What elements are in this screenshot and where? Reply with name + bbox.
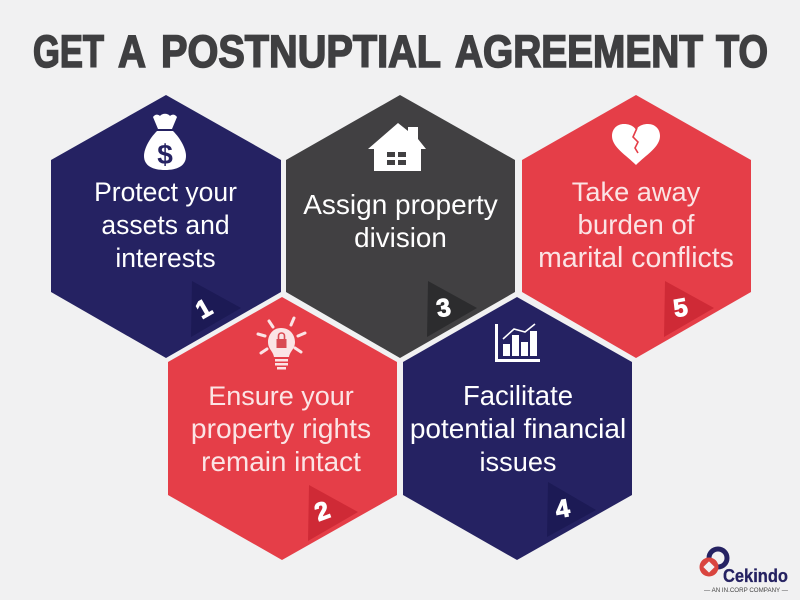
text: facilitate potential financial issues: potential financial — [410, 413, 626, 444]
badge: number 5: 5 — [671, 293, 690, 323]
logo: Cekindo — [700, 549, 788, 594]
text: take away burden of marital conflicts: marital conflicts — [538, 242, 734, 274]
icon: bar chart with trend line — [495, 324, 540, 362]
title — [33, 26, 768, 77]
title: AGREEMENT — [455, 26, 703, 77]
title: TO — [716, 26, 768, 77]
text: ensure your property rights remain intact: remain intact — [201, 446, 361, 477]
badge: number 4 — [547, 482, 596, 537]
text: ensure your property rights remain intact: property rights — [191, 412, 371, 444]
title: POSTNUPTIAL — [161, 26, 441, 77]
badge: number 3 — [427, 281, 477, 337]
badge: number 2 — [308, 485, 358, 541]
text: facilitate potential financial issues: issues — [479, 446, 557, 477]
panel: step 3 assign property division — [286, 95, 515, 358]
badge: number 5 — [664, 281, 714, 337]
text: take away burden of marital conflicts: burden of — [578, 209, 695, 240]
badge: number 2: 2 — [311, 496, 334, 527]
panel: step 1 protect assets — [51, 95, 281, 358]
icon: house — [368, 123, 426, 171]
text: brand name: Cekindo — [723, 566, 788, 586]
text: assign property division: division — [354, 222, 447, 253]
icon: money bag — [144, 114, 186, 170]
badge: number 1 — [191, 281, 241, 337]
icon: logo rings — [700, 549, 727, 576]
text: ensure your property rights remain intact: Ensure your — [208, 381, 354, 411]
badge: number 4: 4 — [553, 494, 572, 524]
text: assign property division: Assign property — [303, 189, 498, 220]
text: take away burden of marital conflicts: Take away — [572, 176, 701, 207]
icon: broken heart — [612, 124, 660, 165]
text: protect your assets and interests: assets and — [101, 210, 230, 240]
title: GET — [33, 26, 104, 77]
panel: step 5 take away burden — [522, 95, 751, 358]
title: A — [118, 26, 146, 77]
text: tagline: — AN IN.CORP COMPANY — — [704, 588, 788, 594]
text: protect your assets and interests: interests — [115, 243, 216, 273]
panel: step 4 facilitate financial issues — [403, 297, 632, 560]
badge: number 3: 3 — [434, 293, 453, 323]
text: facilitate potential financial issues: Facilitate — [463, 380, 573, 411]
icon: light bulb with lock — [258, 318, 305, 370]
badge: number 1: 1 — [191, 293, 217, 325]
icon: money bag: $ — [157, 139, 173, 170]
text: protect your assets and interests: Protect your — [94, 177, 237, 207]
panel: step 2 ensure property rights — [168, 297, 397, 560]
